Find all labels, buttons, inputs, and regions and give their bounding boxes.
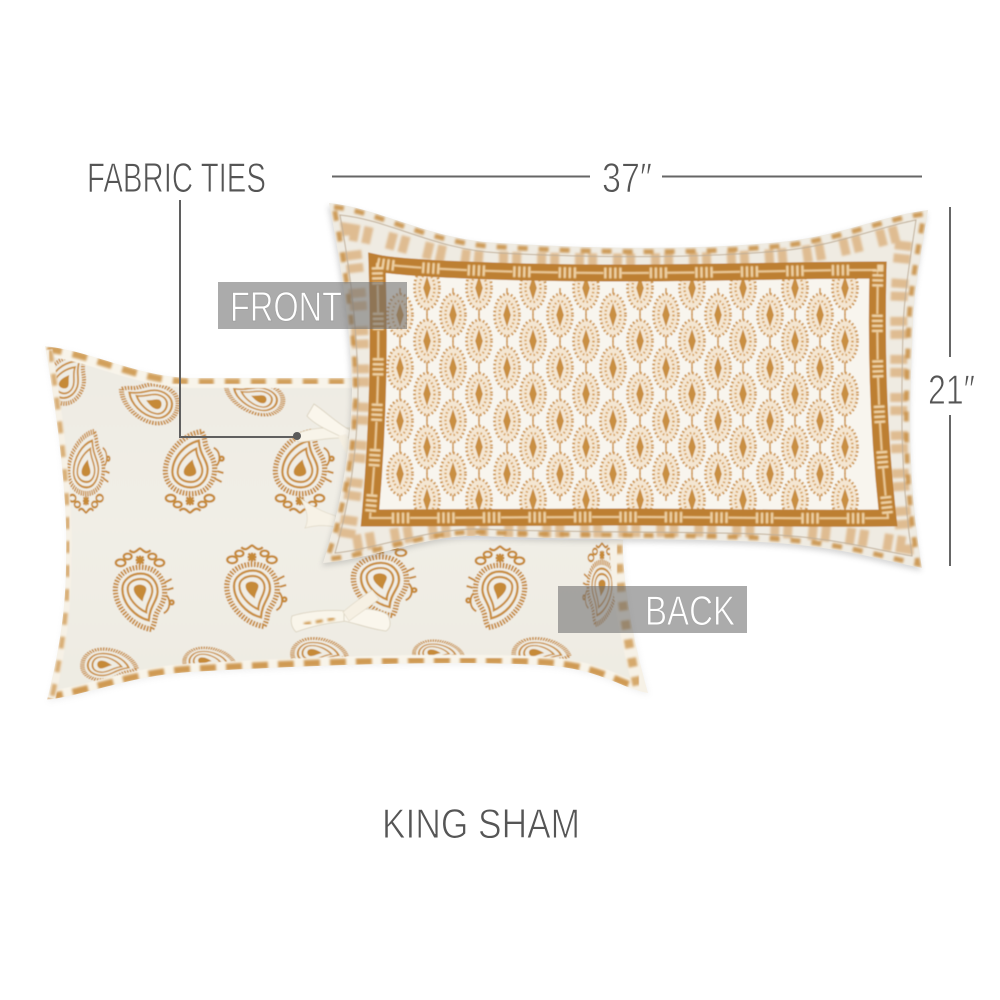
paisley: second row one	[69, 432, 110, 513]
dimension: width 37 inches: 37″	[602, 154, 652, 201]
paisley: third row four	[466, 546, 525, 627]
caption: product name: KING SHAM	[382, 800, 580, 847]
panel: back of king sham	[39, 340, 660, 710]
paisley: top row left	[117, 379, 181, 427]
paisley: second row three	[275, 432, 334, 513]
icon: fabric tie bow lower	[291, 590, 390, 632]
paisley: bottom row three	[290, 636, 350, 659]
leader line: fabric ties pointer	[180, 200, 301, 440]
paisley: bottom row two	[182, 646, 236, 665]
label: BACK	[558, 586, 747, 634]
paisley: bottom row one	[81, 646, 137, 682]
icon: fabric tie upper	[296, 404, 362, 466]
paisley: top row centre	[224, 388, 286, 417]
paisley: third row three	[353, 539, 416, 616]
pattern: lace medallion rows	[386, 275, 860, 511]
icon: fabric tie middle	[300, 498, 336, 528]
paisley: upper left corner	[54, 358, 87, 406]
flange between band and outer edge	[315, 195, 935, 575]
panel: front of king sham	[315, 195, 935, 575]
paisley: third row five	[583, 543, 616, 624]
paisley: third row one	[115, 548, 174, 629]
dimension: height 21 inches: 21″	[928, 366, 975, 413]
paisley: second row two	[165, 432, 224, 513]
band: orange border frame	[370, 263, 888, 518]
heading: fabric ties callout: FABRIC TIES	[87, 154, 266, 201]
paisley: third row two	[227, 545, 286, 626]
label: FRONT: FRONT	[230, 283, 342, 330]
hem: back pillow edges	[45, 346, 650, 700]
label: BACK: BACK	[645, 587, 735, 634]
paisley: bottom row four	[411, 638, 465, 656]
paisley: bottom row five	[510, 636, 572, 660]
